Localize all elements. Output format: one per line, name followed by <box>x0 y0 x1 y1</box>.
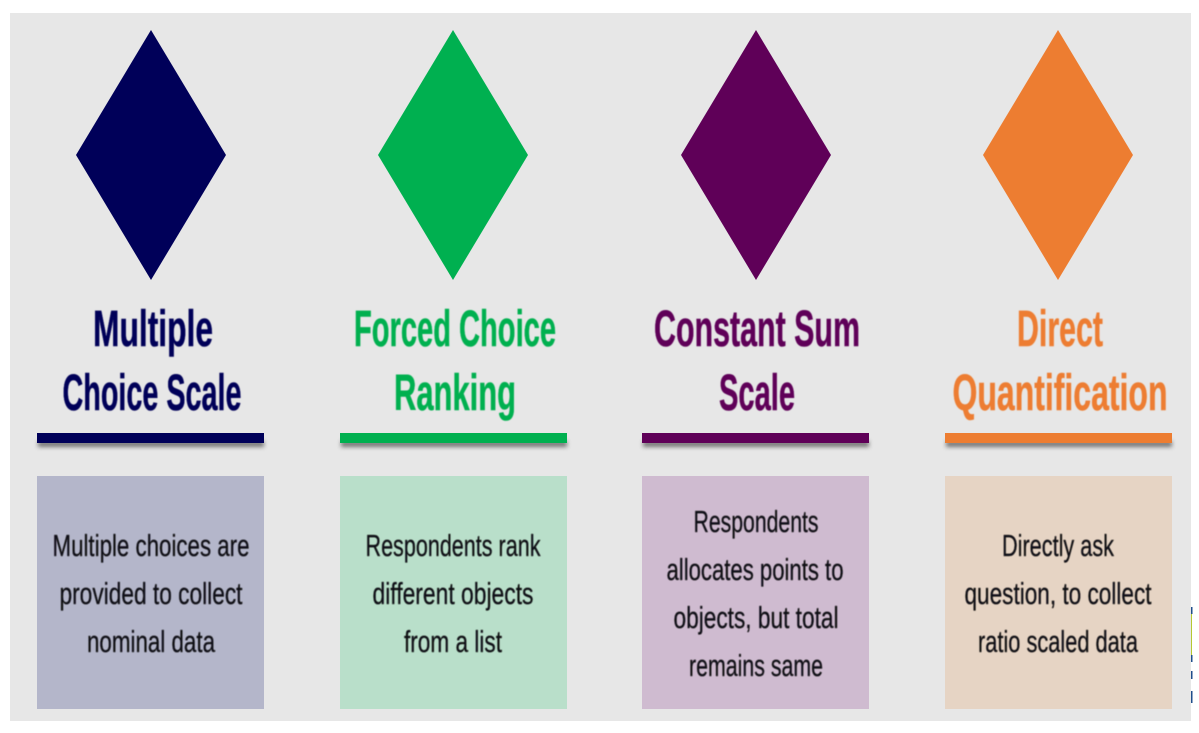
underline bar <box>945 433 1172 443</box>
heading: Multiple Choice Scale: Multiple <box>93 300 213 357</box>
heading: Direct Quantification <box>952 300 1168 421</box>
description text <box>366 528 541 659</box>
heading: Constant Sum Scale: Scale <box>719 364 795 421</box>
icon: green diamond <box>378 30 528 280</box>
underline bar <box>37 433 264 443</box>
description text <box>666 504 844 683</box>
description text: Multiple choices are <box>52 528 250 563</box>
description box <box>642 476 869 709</box>
description box <box>340 476 567 709</box>
description box <box>37 476 264 709</box>
description text: from a list <box>404 624 502 659</box>
panel: Forced Choice Ranking <box>340 30 567 709</box>
heading: Forced Choice Ranking: Forced Choice <box>354 300 556 357</box>
description text <box>52 528 250 659</box>
heading: Constant Sum Scale: Constant Sum <box>654 300 860 357</box>
description text <box>964 528 1152 659</box>
description text: Respondents <box>694 504 818 539</box>
heading: Multiple Choice Scale: Choice Scale <box>62 364 241 421</box>
heading: Forced Choice Ranking <box>354 300 556 421</box>
description text: remains same <box>689 648 823 683</box>
heading: Forced Choice Ranking: Ranking <box>394 364 516 421</box>
heading: Constant Sum Scale <box>654 300 860 421</box>
icon: orange diamond <box>983 30 1133 280</box>
panel: Constant Sum Scale <box>642 30 869 709</box>
description text: Respondents rank <box>366 528 541 563</box>
description box <box>945 476 1172 709</box>
heading: Direct Quantification: Direct <box>1017 300 1103 357</box>
description text: provided to collect <box>60 576 243 611</box>
description text: ratio scaled data <box>978 624 1139 659</box>
description text: objects, but total <box>674 600 838 635</box>
icon: purple diamond <box>681 30 831 280</box>
description text: allocates points to <box>666 552 844 587</box>
description text: different objects <box>372 576 534 611</box>
description text: nominal data <box>87 624 216 659</box>
heading: Multiple Choice Scale <box>62 300 241 421</box>
panel: Multiple Choice Scale <box>37 30 264 709</box>
description text: Directly ask <box>1002 528 1114 563</box>
edge artifact <box>1191 607 1192 703</box>
icon: navy diamond <box>76 30 226 280</box>
underline bar <box>642 433 869 443</box>
underline bar <box>340 433 567 443</box>
panel: Direct Quantification <box>945 30 1172 709</box>
